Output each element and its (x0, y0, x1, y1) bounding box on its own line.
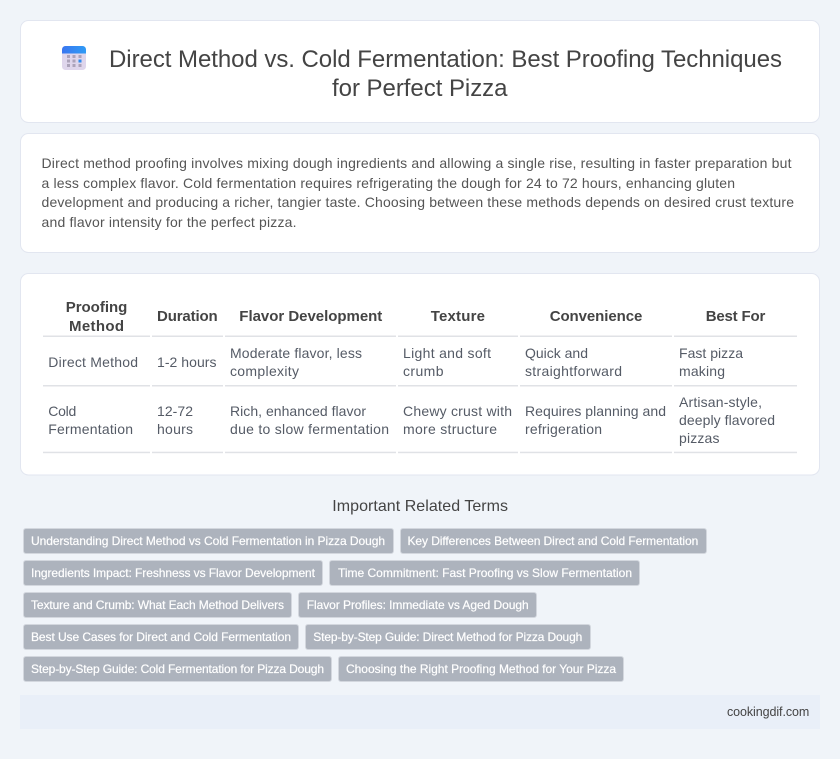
table row: cold fermentation: Artisan-style, (679, 394, 762, 410)
table header row: Flavor Development (239, 308, 382, 325)
table row: direct method: Light and soft (403, 345, 491, 361)
table header row: Proofing (66, 299, 127, 316)
table row: direct method (48, 345, 743, 379)
table row: direct method: making (679, 363, 725, 379)
table row: cold fermentation: Chewy crust with (403, 403, 512, 419)
panel: summary paragraph (20, 134, 820, 252)
table header row: Texture (431, 308, 485, 325)
table row: direct method: 1-2 hours (157, 354, 216, 370)
tag list (24, 528, 706, 682)
table row: direct method: Fast pizza (679, 345, 743, 361)
table header row (66, 299, 765, 335)
table row: cold fermentation: Cold (48, 403, 76, 419)
table row: cold fermentation: pizzas (679, 430, 720, 446)
footer: cookingdif.com (727, 705, 809, 719)
tag: Ingredients Impact: Freshness vs Flavor Development (31, 566, 316, 580)
tag: Time Commitment: Fast Proofing vs Slow Fermentation (338, 566, 632, 580)
table row: direct method: Quick and (525, 345, 588, 361)
tag: Understanding Direct Method vs Cold Fermentation in Pizza Dough (31, 534, 385, 548)
table row: direct method: Direct Method (48, 354, 138, 370)
text block: summary: Direct method proofing involves mixing dough ingredients and allowing a single rise, resulting in faster preparation but (42, 155, 792, 171)
icon: calendar (62, 46, 86, 70)
table row: cold fermentation: deeply flavored (679, 412, 775, 428)
tag (24, 592, 292, 618)
tag: Key Differences Between Direct and Cold Fermentation (408, 534, 698, 548)
text block: summary: development and producing a richer, tangier taste. Choosing between these methods depends on desired crust texture (42, 194, 794, 210)
title: for Perfect Pizza (332, 75, 508, 102)
table row: cold fermentation: due to slow fermentation (230, 421, 389, 437)
panel: comparison table (20, 274, 820, 475)
table row: cold fermentation: Fermentation (48, 421, 133, 437)
text block: summary (42, 155, 794, 230)
text block: summary: and flavor intensity for the perfect pizza. (42, 214, 296, 230)
heading: important related terms: Important Related Terms (332, 498, 508, 515)
footer (20, 695, 820, 729)
title (109, 46, 782, 102)
tag (400, 528, 706, 554)
table header row: Duration (157, 308, 218, 325)
title: Direct Method vs. Cold Fermentation: Best Proofing Techniques (109, 46, 782, 73)
table row: cold fermentation: Requires planning and (525, 403, 666, 419)
tag: Step-by-Step Guide: Direct Method for Pizza Dough (313, 630, 582, 644)
panel: header (20, 20, 820, 122)
tag: Step-by-Step Guide: Cold Fermentation for Pizza Dough (31, 662, 324, 676)
table header row: Convenience (550, 308, 642, 325)
tag: Texture and Crumb: What Each Method Delivers (31, 598, 284, 612)
table header row: Best For (706, 308, 765, 325)
table row: cold fermentation: refrigeration (525, 421, 602, 437)
tag (24, 528, 394, 554)
table row: cold fermentation: 12-72 (157, 403, 193, 419)
table row: cold fermentation: more structure (403, 421, 497, 437)
table row: direct method: Moderate flavor, less (230, 345, 362, 361)
tag: Flavor Profiles: Immediate vs Aged Dough (307, 598, 529, 612)
table row: cold fermentation: Rich, enhanced flavor (230, 403, 366, 419)
tag (298, 592, 536, 618)
table row: direct method: straightforward (525, 363, 622, 379)
table row: cold fermentation (48, 394, 775, 446)
tag: Choosing the Right Proofing Method for Your Pizza (346, 662, 616, 676)
text block: summary: a less complex flavor. Cold fermentation requires refrigerating the dough for 24 to 72 hours, enhancing gluten (42, 175, 735, 191)
tag (24, 560, 322, 586)
tag (306, 624, 590, 650)
table row: cold fermentation: hours (157, 421, 193, 437)
tag: Best Use Cases for Direct and Cold Fermentation (31, 630, 291, 644)
table header row: Method (69, 318, 124, 335)
table row: direct method: complexity (230, 363, 299, 379)
tag (24, 624, 298, 650)
tag (338, 656, 624, 682)
tag (24, 656, 332, 682)
tag (330, 560, 640, 586)
table row: direct method: crumb (403, 363, 444, 379)
